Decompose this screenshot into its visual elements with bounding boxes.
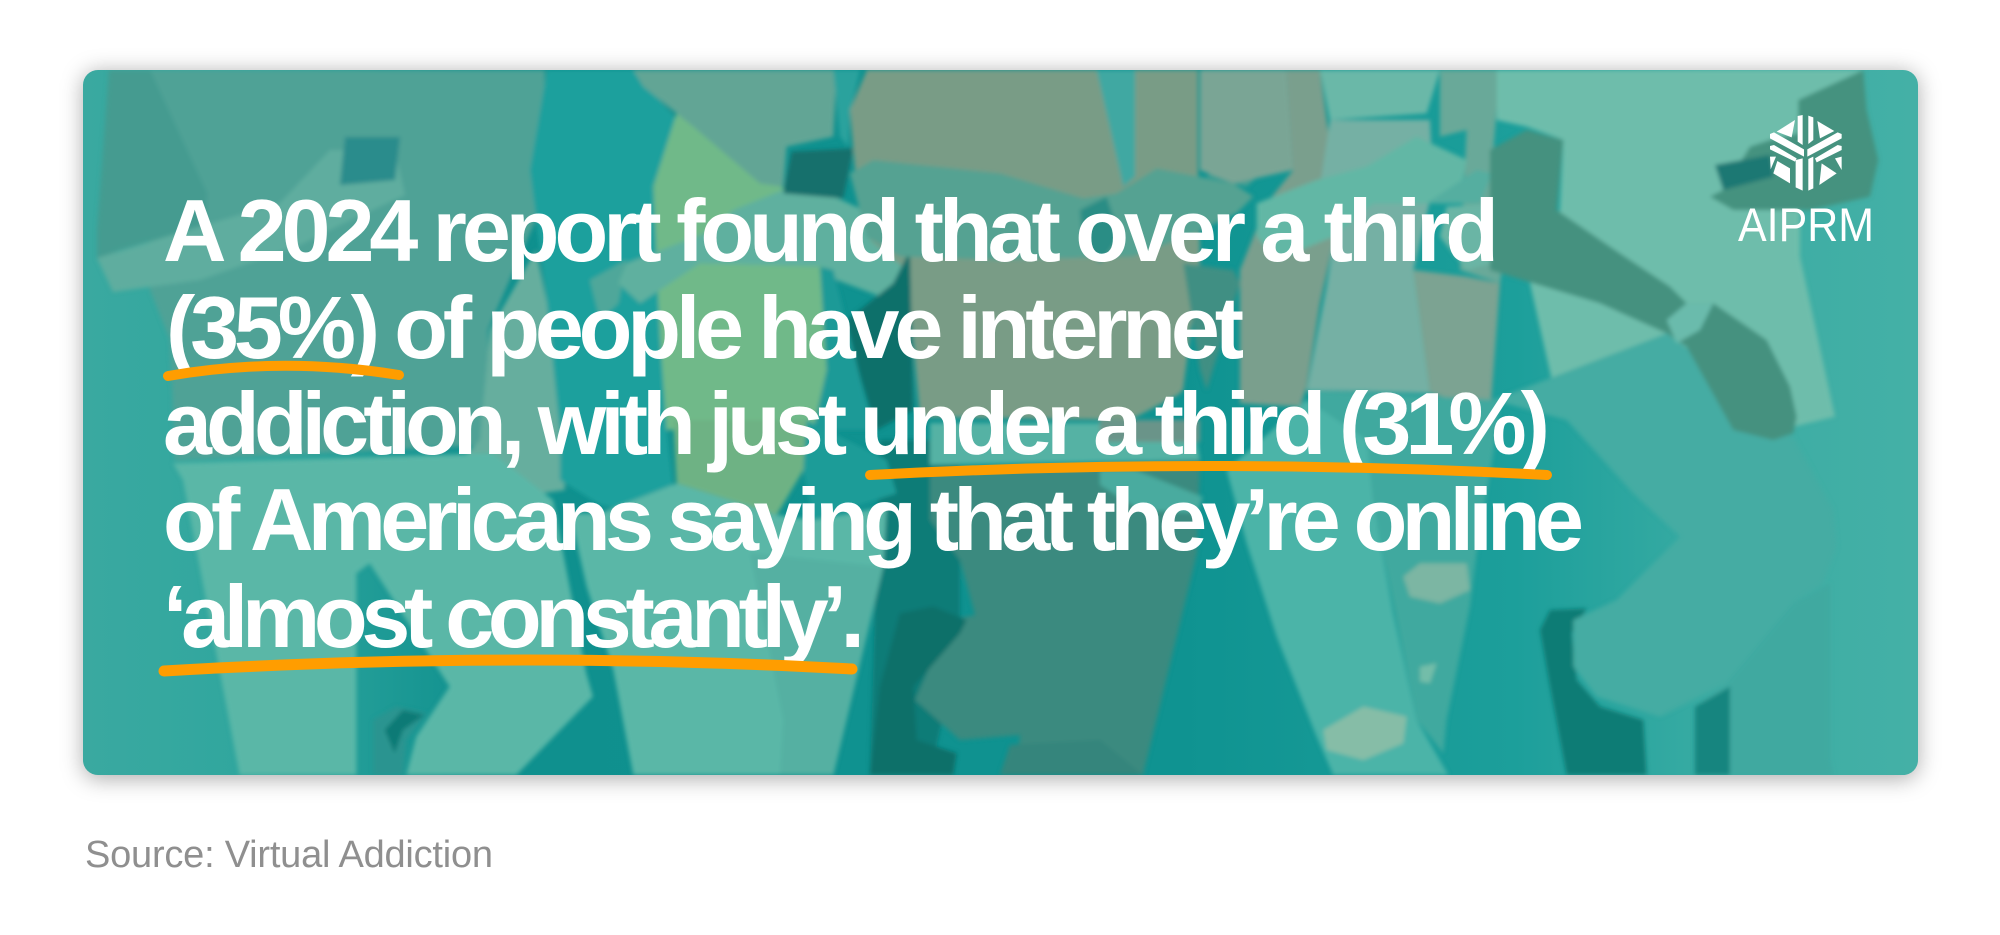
person 5: light shirt and jeans <box>1490 70 1878 775</box>
person 2: denim jacket and yellow shirt <box>530 70 908 775</box>
headline text: ‘almost constantly’. <box>163 567 865 666</box>
headline text: (35%) of people have internet <box>166 278 1244 377</box>
logo icon: AIPRM hexagon <box>1770 115 1842 191</box>
card shadow <box>83 72 1918 779</box>
headline text: of Americans saying that they’re online <box>163 470 1584 569</box>
underline: almost constantly <box>164 660 852 671</box>
photo: teens holding phones <box>97 70 1878 775</box>
shadow behind central figure <box>870 440 960 775</box>
underline: 35% <box>168 366 399 376</box>
person 3: orange shirt and grey trousers <box>813 70 1507 775</box>
underline: under a third (31%) <box>870 466 1547 475</box>
person 4: ripped jeans <box>1227 390 1500 775</box>
person 4 upper body <box>1200 70 1293 183</box>
person 1: grey tee and ripped jeans <box>97 70 593 775</box>
headline text: addiction, with just under a third (31%) <box>163 374 1550 473</box>
panel: photo card <box>83 70 1918 775</box>
headline text <box>163 181 1584 666</box>
logo wordmark: AIPRM <box>1738 198 1874 251</box>
source line: Source: Virtual Addiction <box>85 834 493 876</box>
headline text: A 2024 report found that over a third <box>163 181 1499 280</box>
